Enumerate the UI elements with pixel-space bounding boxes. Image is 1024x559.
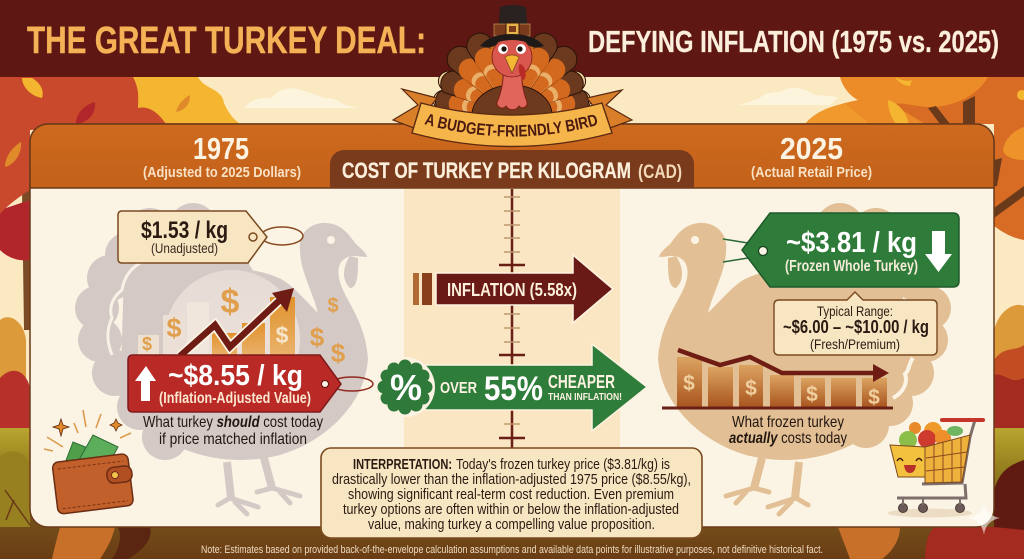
percent badge: % xyxy=(390,367,422,408)
main panel xyxy=(30,124,994,527)
center tab heading xyxy=(330,150,694,188)
banner ribbon xyxy=(411,102,613,148)
dollar signs: $ xyxy=(221,283,240,321)
left heading 1975: 1975 xyxy=(193,131,249,166)
price tag: ~$8.55 inflation-adjusted xyxy=(128,355,373,412)
banner ribbon: A BUDGET-FRIENDLY BIRD xyxy=(424,114,597,137)
panel header band xyxy=(30,124,994,188)
interpretation box: value, making turkey a compelling value proposition. xyxy=(368,516,655,533)
interpretation box: INTERPRETATION: xyxy=(353,456,452,473)
bottom foliage xyxy=(52,460,1024,559)
price tag: ~$8.55 inflation-adjusted: (Inflation-Adjusted Value) xyxy=(159,390,311,407)
rising arrow xyxy=(180,288,294,356)
price tag: $1.53 unadjusted: $1.53 / kg xyxy=(141,217,228,244)
clouds xyxy=(244,88,838,108)
left caption: What turkey should cost today xyxy=(143,414,323,431)
falling trend arrow xyxy=(678,350,889,382)
percent badge xyxy=(375,357,435,417)
left caption xyxy=(143,414,323,448)
center strip xyxy=(404,189,620,449)
dollar signs: $ xyxy=(166,313,182,343)
ground xyxy=(0,428,1024,559)
title bar xyxy=(0,0,1024,77)
dollar signs: $ xyxy=(276,322,289,348)
right heading 2025: (Actual Retail Price) xyxy=(751,165,872,181)
right caption xyxy=(729,414,847,447)
interpretation box: drastically lower than the inflation-adjusted 1975 price ($8.55/kg), xyxy=(332,471,691,488)
left trees xyxy=(0,77,240,428)
right caption: actually costs today xyxy=(729,430,847,447)
callout: typical range: Typical Range: xyxy=(817,303,893,319)
savings arrow: OVER xyxy=(440,380,477,397)
dollar signs: $ xyxy=(310,322,325,352)
right caption: What frozen turkey xyxy=(732,414,844,431)
interpretation box: showing significant real-term cost reduction. Even premium xyxy=(348,486,674,503)
left heading 1975 xyxy=(143,131,301,181)
price tag: ~$8.55 inflation-adjusted: ~$8.55 / kg xyxy=(168,360,303,392)
declining bar chart: $ xyxy=(745,377,757,400)
inflation arrow: INFLATION (5.58x) xyxy=(447,280,577,300)
dollar signs xyxy=(142,283,346,368)
sparkle watermark xyxy=(967,503,1000,535)
savings arrow: THAN INFLATION! xyxy=(548,391,622,403)
icon: wallet with cash xyxy=(44,410,136,514)
dollar signs: $ xyxy=(142,334,152,354)
right heading 2025: 2025 xyxy=(780,131,843,166)
price tag: ~$3.81 frozen: ~$3.81 / kg xyxy=(786,227,917,259)
dollar signs: $ xyxy=(327,295,339,317)
ribbon tails xyxy=(393,89,632,128)
price tag: ~$3.81 frozen: (Frozen Whole Turkey) xyxy=(785,258,918,275)
inflation bar chart xyxy=(138,270,300,410)
title: main: THE GREAT TURKEY DEAL: xyxy=(27,20,426,62)
declining bar chart: $ xyxy=(683,372,695,395)
right heading 2025 xyxy=(751,131,872,181)
interpretation box: Today's frozen turkey price ($3.81/kg) is xyxy=(456,456,670,473)
callout: typical range xyxy=(774,292,937,355)
dollar signs: $ xyxy=(331,338,346,368)
body xyxy=(472,85,552,128)
declining bar chart xyxy=(662,357,893,409)
center tab heading: COST OF TURKEY PER KILOGRAM xyxy=(342,158,631,183)
declining bar chart: $ xyxy=(806,383,818,406)
left turkey silhouette xyxy=(75,203,368,514)
footnote: Note: Estimates based on provided back-of-the-envelope calculation assumptions and available data points for illustrative purposes, not definitive historical fact. xyxy=(201,544,823,556)
axis with ticks xyxy=(499,189,525,449)
tail feathers xyxy=(431,29,593,127)
price tag: $1.53 unadjusted xyxy=(118,211,303,263)
interpretation box: turkey options are often within or below the inflation-adjusted xyxy=(343,501,679,518)
savings arrow: 55% xyxy=(484,370,543,408)
savings arrow xyxy=(375,344,647,431)
mascot turkey with pilgrim hat xyxy=(392,5,634,148)
neck and head xyxy=(492,37,532,110)
price tag: $1.53 unadjusted: (Unadjusted) xyxy=(151,240,218,256)
center tab heading: (CAD) xyxy=(638,162,682,183)
icon: smiling shopping cart xyxy=(888,420,983,518)
price tag: ~$3.81 frozen xyxy=(723,213,959,287)
left heading 1975: (Adjusted to 2025 Dollars) xyxy=(143,165,301,181)
right turkey silhouette xyxy=(658,203,951,514)
pilgrim hat xyxy=(480,5,544,47)
left caption: if price matched inflation xyxy=(159,431,307,448)
inflation arrow xyxy=(413,255,613,323)
right trees xyxy=(805,77,1024,428)
interpretation box xyxy=(321,448,702,538)
callout: typical range: (Fresh/Premium) xyxy=(810,336,900,352)
callout: typical range: ~$6.00 – ~$10.00 / kg xyxy=(783,317,929,337)
savings arrow: CHEAPER xyxy=(548,372,615,392)
declining bar chart: $ xyxy=(868,386,880,409)
